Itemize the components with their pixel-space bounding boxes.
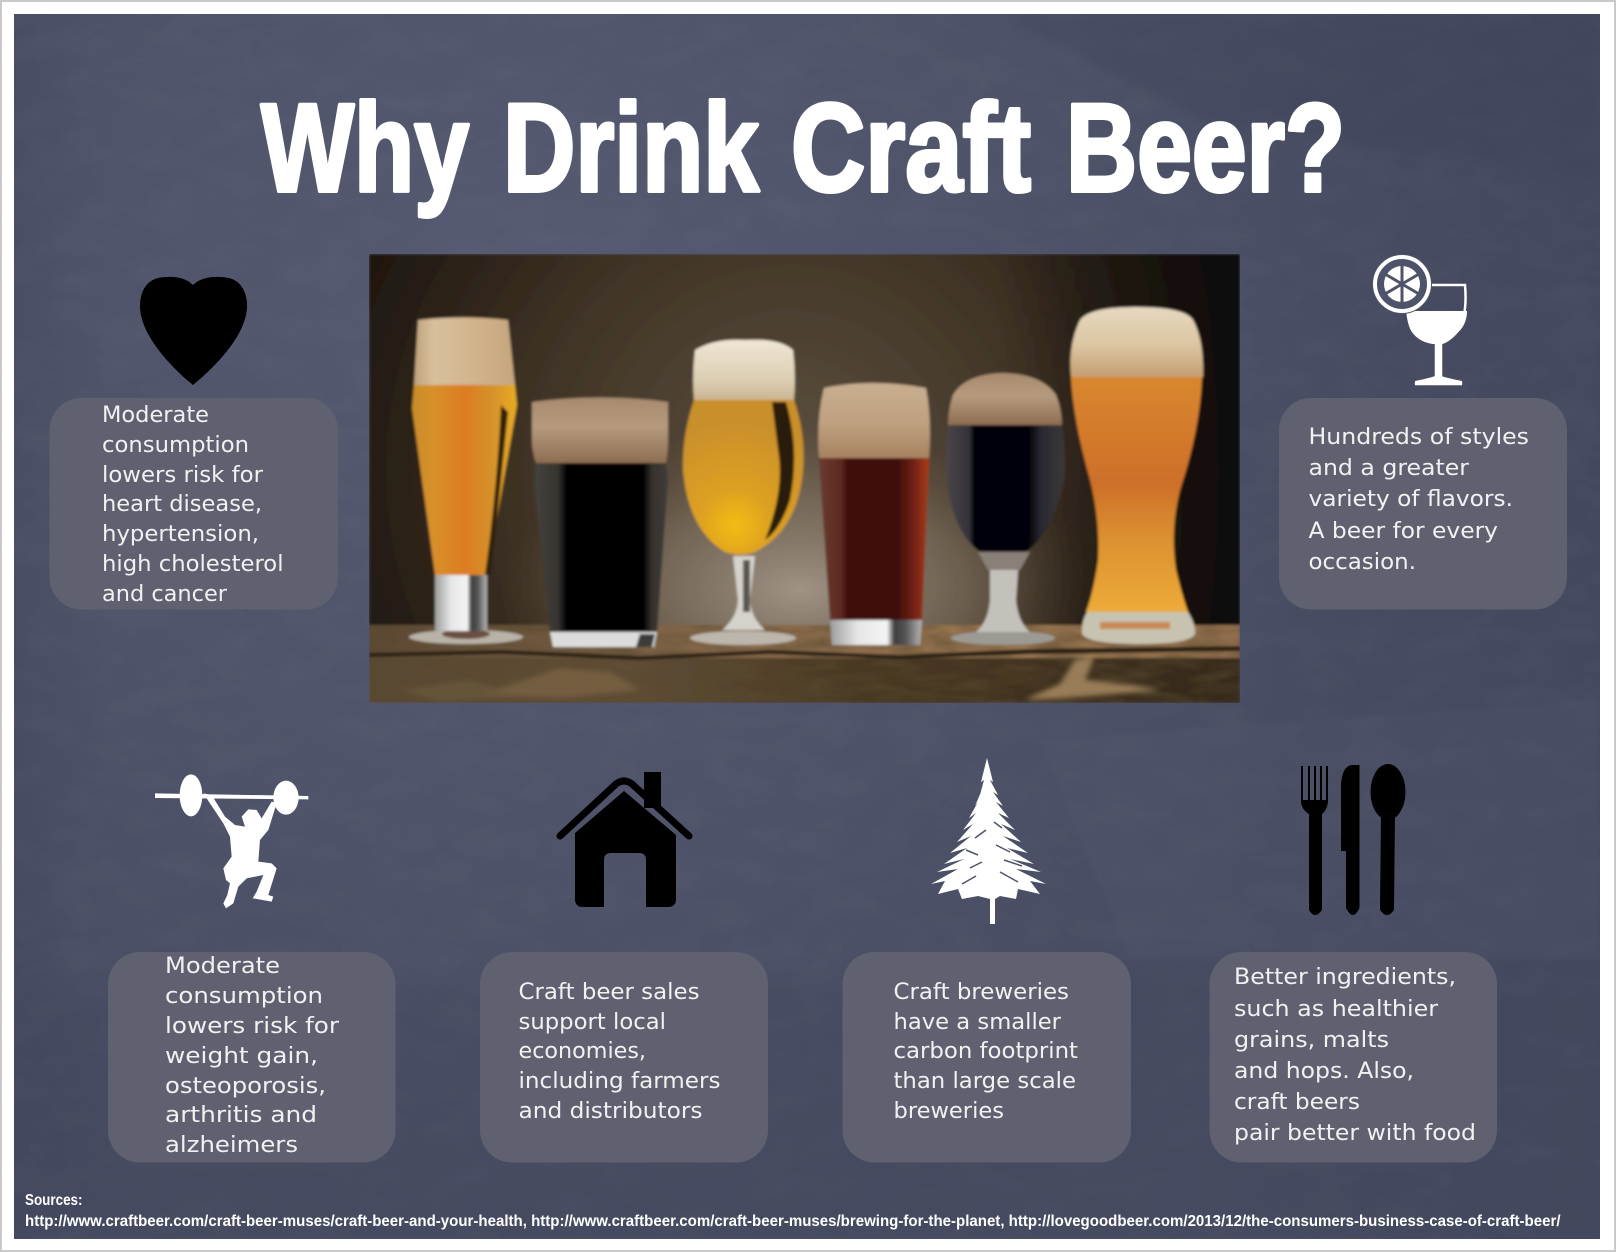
callout box: carbon footprint	[842, 952, 1131, 1162]
text: weight and bone benefits: alzheimers	[165, 1132, 298, 1158]
text: heart health benefits: heart disease,	[102, 491, 262, 517]
text: styles and flavors: variety of flavors.	[1308, 486, 1513, 512]
text: local economies: including farmers	[518, 1068, 720, 1094]
glass 6: weizen	[1070, 307, 1203, 644]
glass 3: golden tulip	[683, 340, 804, 645]
text: weight and bone benefits: arthritis and	[165, 1102, 317, 1128]
icon: heart	[140, 277, 247, 385]
text: ingredients and food pairing: and hops. Also,	[1234, 1058, 1414, 1084]
text: heart health benefits: Moderate	[102, 402, 209, 428]
text: heart health benefits: high cholesterol	[102, 551, 284, 577]
callout box: ingredients and food pairing	[1210, 952, 1497, 1162]
text: carbon footprint: have a smaller	[894, 1009, 1062, 1035]
sources	[25, 1192, 1561, 1230]
icon: pine tree	[931, 758, 1046, 924]
text: weight and bone benefits: Moderate	[165, 953, 280, 979]
text: ingredients and food pairing: Better ingredients,	[1234, 964, 1456, 990]
glass 1: amber pilsner	[409, 318, 523, 644]
text: local economies: support local	[518, 1009, 666, 1035]
title: Craft	[791, 79, 1031, 218]
wooden board	[369, 625, 1240, 703]
text: weight and bone benefits: weight gain,	[165, 1043, 318, 1069]
text: styles and flavors: occasion.	[1308, 549, 1416, 575]
text: local economies: Craft beer sales	[518, 979, 700, 1005]
text: weight and bone benefits: osteoporosis,	[165, 1073, 326, 1099]
text: heart health benefits: and cancer	[102, 581, 228, 607]
icon: house	[560, 772, 689, 907]
text: styles and flavors: Hundreds of styles	[1308, 424, 1529, 450]
panel: weight and bone health	[108, 774, 396, 1162]
text: styles and flavors: A beer for every	[1308, 518, 1498, 544]
text: heart health benefits: consumption	[102, 432, 249, 458]
text: ingredients and food pairing: such as healthier	[1234, 996, 1439, 1022]
text: carbon footprint: than large scale	[894, 1068, 1076, 1094]
text: weight and bone benefits: lowers risk for	[165, 1013, 340, 1039]
sources: http://www.craftbeer.com/craft-beer-muses/craft-beer-and-your-health, http://www.craftbeer.com/craft-beer-muses/brewing-for-the-planet, http://lovegoodbeer.com/2013/12/the-consumers-business-case-of-craft-beer/	[25, 1213, 1561, 1230]
text: styles and flavors: and a greater	[1308, 455, 1470, 481]
photo: six glasses of craft beer on a wooden board	[369, 254, 1240, 703]
title: Why	[261, 79, 469, 218]
callout box: heart health	[50, 398, 338, 610]
icon: fork, knife and spoon	[1301, 764, 1406, 915]
title: Drink	[503, 79, 759, 218]
sources: Sources:	[25, 1192, 82, 1209]
photo backdrop wall	[369, 254, 1240, 626]
glass 4: red ale	[818, 383, 930, 645]
text: carbon footprint: carbon footprint	[894, 1038, 1078, 1064]
text: ingredients and food pairing: craft beers	[1234, 1089, 1360, 1115]
panel: variety of styles	[1279, 254, 1567, 610]
panel: ingredients and food pairing	[1210, 764, 1497, 1162]
callout box: local economies	[480, 952, 768, 1162]
text: local economies: economies,	[518, 1038, 646, 1064]
glass 2: dark stout pint	[532, 398, 668, 647]
glass 5: dark goblet	[946, 373, 1065, 645]
panel: local economies	[480, 772, 768, 1162]
panel: carbon footprint	[842, 758, 1131, 1162]
text: ingredients and food pairing: grains, malts	[1234, 1027, 1389, 1053]
title: Beer?	[1066, 79, 1345, 218]
callout box: weight and bone health	[108, 952, 396, 1162]
text: carbon footprint: Craft breweries	[894, 979, 1069, 1005]
text: weight and bone benefits: consumption	[165, 983, 323, 1009]
icon: weightlifter	[155, 774, 308, 908]
panel: heart health	[50, 277, 338, 610]
text: carbon footprint: breweries	[894, 1098, 1004, 1124]
text: ingredients and food pairing: pair better with food	[1234, 1120, 1476, 1146]
callout box: variety of styles	[1279, 398, 1567, 610]
text: heart health benefits: lowers risk for	[102, 462, 264, 488]
text: heart health benefits: hypertension,	[102, 521, 259, 547]
text: local economies: and distributors	[518, 1098, 702, 1124]
icon: wine glass with citrus slice	[1372, 254, 1467, 384]
